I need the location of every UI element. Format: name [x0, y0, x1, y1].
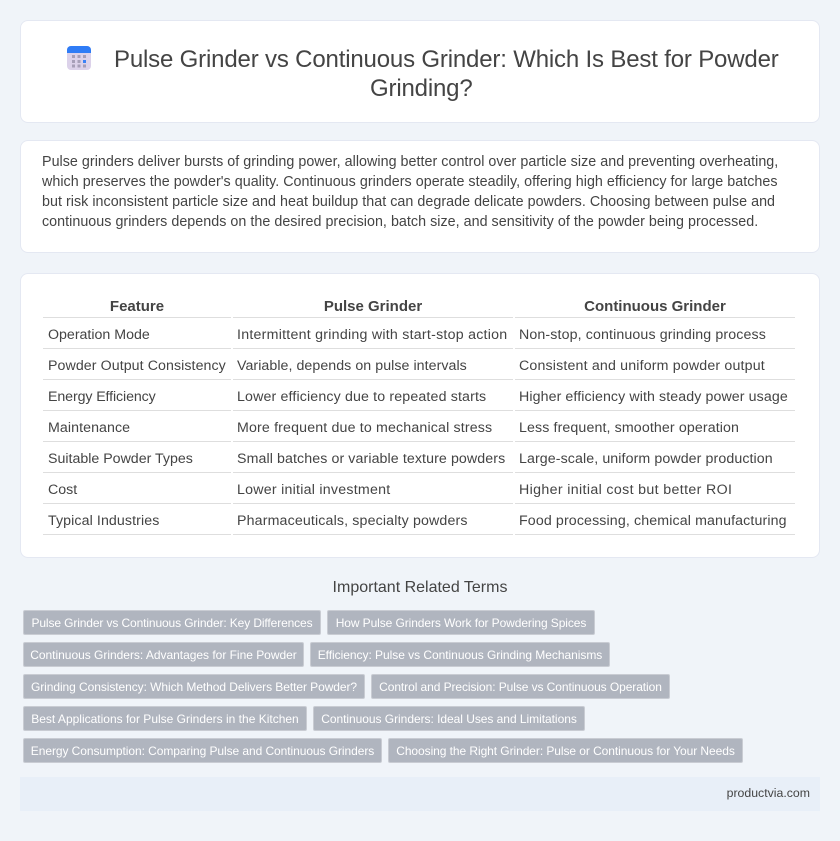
tag group: related terms: Continuous Grinders: Advantages for Fine Powder	[30, 648, 297, 662]
table row: energy efficiency: Higher efficiency with steady power usage	[519, 389, 788, 405]
tag group: related terms: Pulse Grinder vs Continuous Grinder: Key Differences	[31, 616, 312, 630]
table row: typical industries: Pharmaceuticals, specialty powders	[237, 513, 468, 529]
tag group: related terms: Best Applications for Pulse Grinders in the Kitchen	[31, 712, 299, 726]
table row: operation mode: Operation Mode	[48, 327, 150, 343]
text block: summary	[42, 154, 778, 230]
tag group: related terms	[23, 610, 743, 763]
panel: summary	[20, 140, 820, 253]
table header	[110, 298, 726, 315]
text block: summary: continuous grinders depends on the desired precision, batch size, and sensitivity of the powder being processed.	[42, 214, 758, 230]
table row: cost: Lower initial investment	[237, 482, 390, 498]
table header: Continuous Grinder	[584, 298, 726, 315]
table row: operation mode	[48, 327, 766, 343]
table row: operation mode: Non-stop, continuous grinding process	[519, 327, 766, 343]
tag group: related terms: Control and Precision: Pulse vs Continuous Operation	[379, 680, 662, 694]
table row: suitable powder types: Suitable Powder Types	[48, 451, 193, 467]
table row: suitable powder types: Small batches or variable texture powders	[237, 451, 505, 467]
table row: cost: Higher initial cost but better ROI	[519, 482, 732, 498]
title	[114, 46, 779, 102]
text block: summary: Pulse grinders deliver bursts of grinding power, allowing better control over particle size and preventing overheating,	[42, 154, 778, 170]
table row: cost: Cost	[48, 482, 77, 498]
heading: related terms: Important Related Terms	[333, 579, 507, 596]
title: Pulse Grinder vs Continuous Grinder: Which Is Best for Powder	[114, 46, 779, 73]
table row: maintenance: Less frequent, smoother operation	[519, 420, 739, 436]
tag group: related terms: Energy Consumption: Comparing Pulse and Continuous Grinders	[31, 744, 374, 758]
tag group: related terms: Grinding Consistency: Which Method Delivers Better Powder?	[31, 680, 357, 694]
table row: energy efficiency: Lower efficiency due to repeated starts	[237, 389, 486, 405]
table row: typical industries: Typical Industries	[48, 513, 159, 529]
table row: suitable powder types	[48, 451, 773, 467]
footer bar	[20, 777, 820, 811]
table row: typical industries: Food processing, chemical manufacturing	[519, 513, 787, 529]
tag group: related terms: How Pulse Grinders Work for Powdering Spices	[336, 616, 586, 630]
table row: energy efficiency: Energy Efficiency	[48, 389, 156, 405]
footer bar: productvia.com	[727, 786, 810, 800]
table row: energy efficiency	[48, 389, 788, 405]
table row: powder output consistency: Variable, depends on pulse intervals	[237, 358, 467, 374]
table header: Feature	[110, 298, 164, 315]
text block: summary: but risk inconsistent particle size and heat buildup that can degrade delicate powders. Choosing between pulse and	[42, 194, 775, 210]
table row: maintenance	[48, 420, 739, 436]
icon: calendar	[67, 46, 91, 70]
tag group: related terms: Choosing the Right Grinder: Pulse or Continuous for Your Needs	[396, 744, 735, 758]
panel: comparison table	[20, 273, 820, 558]
table row: suitable powder types: Large-scale, uniform powder production	[519, 451, 773, 467]
table row: operation mode: Intermittent grinding with start-stop action	[237, 327, 507, 343]
table row: powder output consistency: Consistent and uniform powder output	[519, 358, 765, 374]
tag group: related terms: Continuous Grinders: Ideal Uses and Limitations	[321, 712, 577, 726]
table row: typical industries	[48, 513, 787, 529]
table row: powder output consistency	[48, 358, 765, 374]
tag group: related terms: Efficiency: Pulse vs Continuous Grinding Mechanisms	[318, 648, 602, 662]
table header: Pulse Grinder	[324, 298, 422, 315]
title: Grinding?	[370, 75, 473, 102]
table row: maintenance: Maintenance	[48, 420, 130, 436]
table row: cost	[48, 482, 732, 498]
panel: title header	[20, 20, 820, 123]
table row: maintenance: More frequent due to mechanical stress	[237, 420, 492, 436]
text block: summary: which preserves the powder's quality. Continuous grinders operate steadily, offering high efficiency for large batches	[42, 174, 778, 190]
table row: powder output consistency: Powder Output Consistency	[48, 358, 226, 374]
